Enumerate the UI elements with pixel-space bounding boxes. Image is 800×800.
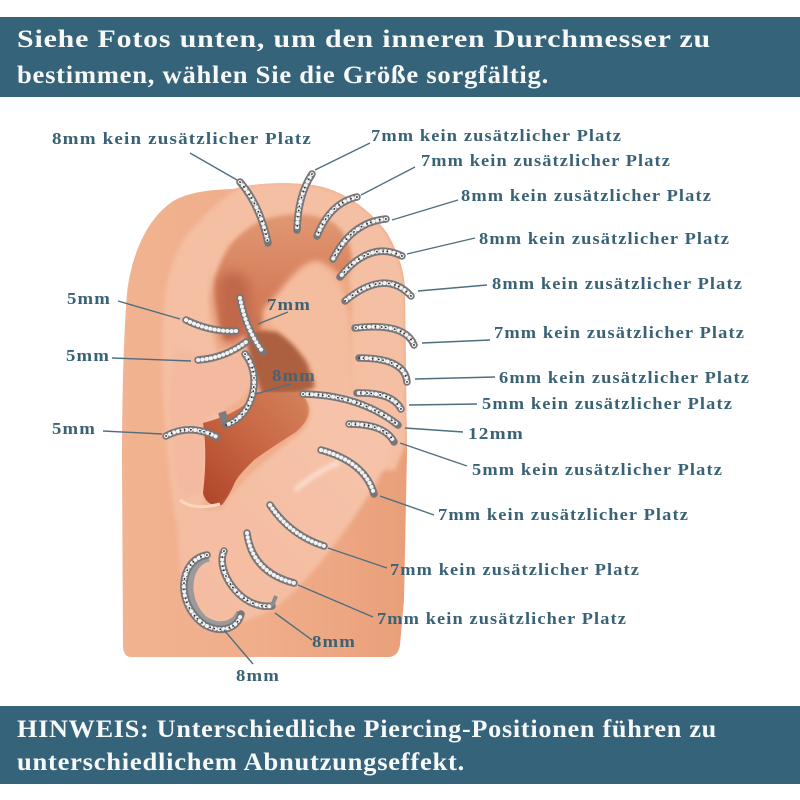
size labels: 8mm: [272, 366, 316, 385]
size labels: [52, 126, 750, 685]
size labels: 12mm: [468, 424, 524, 443]
size labels: 8mm kein zusätzlicher Platz: [52, 129, 312, 148]
ring 19: [240, 298, 263, 352]
ring 8: [359, 358, 407, 382]
size labels: 7mm kein zusätzlicher Platz: [438, 505, 689, 524]
size labels: 7mm kein zusätzlicher Platz: [371, 126, 622, 145]
header band: bestimmen, wählen Sie die Größe sorgfältig.: [17, 62, 549, 89]
header band: Siehe Fotos unten, um den inneren Durchmesser zu: [17, 26, 711, 53]
concha: [203, 392, 309, 505]
brown cavity patch: [245, 330, 315, 395]
ring 2: [297, 174, 312, 230]
ring 21: [166, 430, 217, 437]
size labels: 7mm kein zusätzlicher Platz: [377, 609, 627, 628]
ring 12: [321, 450, 374, 494]
size labels: 5mm: [67, 289, 111, 308]
ring 6: [345, 283, 411, 301]
ring 20: [222, 354, 254, 425]
size labels: 5mm: [66, 346, 110, 365]
footer note band: [0, 706, 800, 784]
size labels: 8mm kein zusätzlicher Platz: [479, 229, 730, 248]
size labels: 7mm kein zusätzlicher Platz: [390, 560, 640, 579]
ring 13: [270, 505, 324, 546]
size labels: 7mm kein zusätzlicher Platz: [421, 151, 671, 170]
ring 14: [247, 533, 294, 583]
ring 16: [184, 555, 241, 629]
ring 7: [355, 327, 414, 345]
ring 3: [317, 197, 357, 236]
size labels: 8mm kein zusätzlicher Platz: [492, 274, 743, 293]
ear lobe and antihelix band: [177, 393, 395, 624]
header band: [0, 17, 800, 97]
ring 4: [333, 219, 386, 259]
size labels: 8mm: [236, 666, 280, 685]
scapha hollow: [215, 214, 352, 340]
ring 5: [340, 251, 402, 277]
ring 17: [186, 320, 236, 331]
pale left side and helix rim: [162, 183, 407, 520]
leader lines: [103, 143, 495, 664]
ring 15: [222, 551, 276, 606]
lobe highlight: [295, 462, 340, 490]
size labels: 7mm kein zusätzlicher Platz: [494, 323, 745, 342]
ring 18: [198, 342, 246, 360]
ear model illustration: [122, 183, 407, 657]
size labels: 5mm kein zusätzlicher Platz: [472, 460, 723, 479]
ring 9: [357, 393, 401, 409]
size labels: 7mm: [267, 295, 311, 314]
size labels: 6mm kein zusätzlicher Platz: [499, 368, 750, 387]
antihelix: [262, 262, 355, 410]
crease highlight: [180, 500, 220, 507]
tragus: [218, 349, 252, 409]
size labels: 5mm: [52, 419, 96, 438]
size labels: 8mm: [312, 632, 356, 651]
size labels: 8mm kein zusätzlicher Platz: [461, 186, 712, 205]
ear inner forms: [162, 183, 407, 624]
ring 11: [349, 424, 394, 442]
ear block body: [122, 183, 407, 657]
size labels: 5mm kein zusätzlicher Platz: [482, 394, 733, 413]
footer note band: unterschiedlichem Abnutzungseffekt.: [17, 749, 465, 776]
earrings: [166, 174, 414, 629]
ring 1: [240, 182, 268, 243]
ring 10: [303, 394, 398, 425]
dark hollow behind rings: [217, 272, 250, 345]
footer note band: HINWEIS: Unterschiedliche Piercing-Positionen führen zu: [17, 716, 717, 743]
